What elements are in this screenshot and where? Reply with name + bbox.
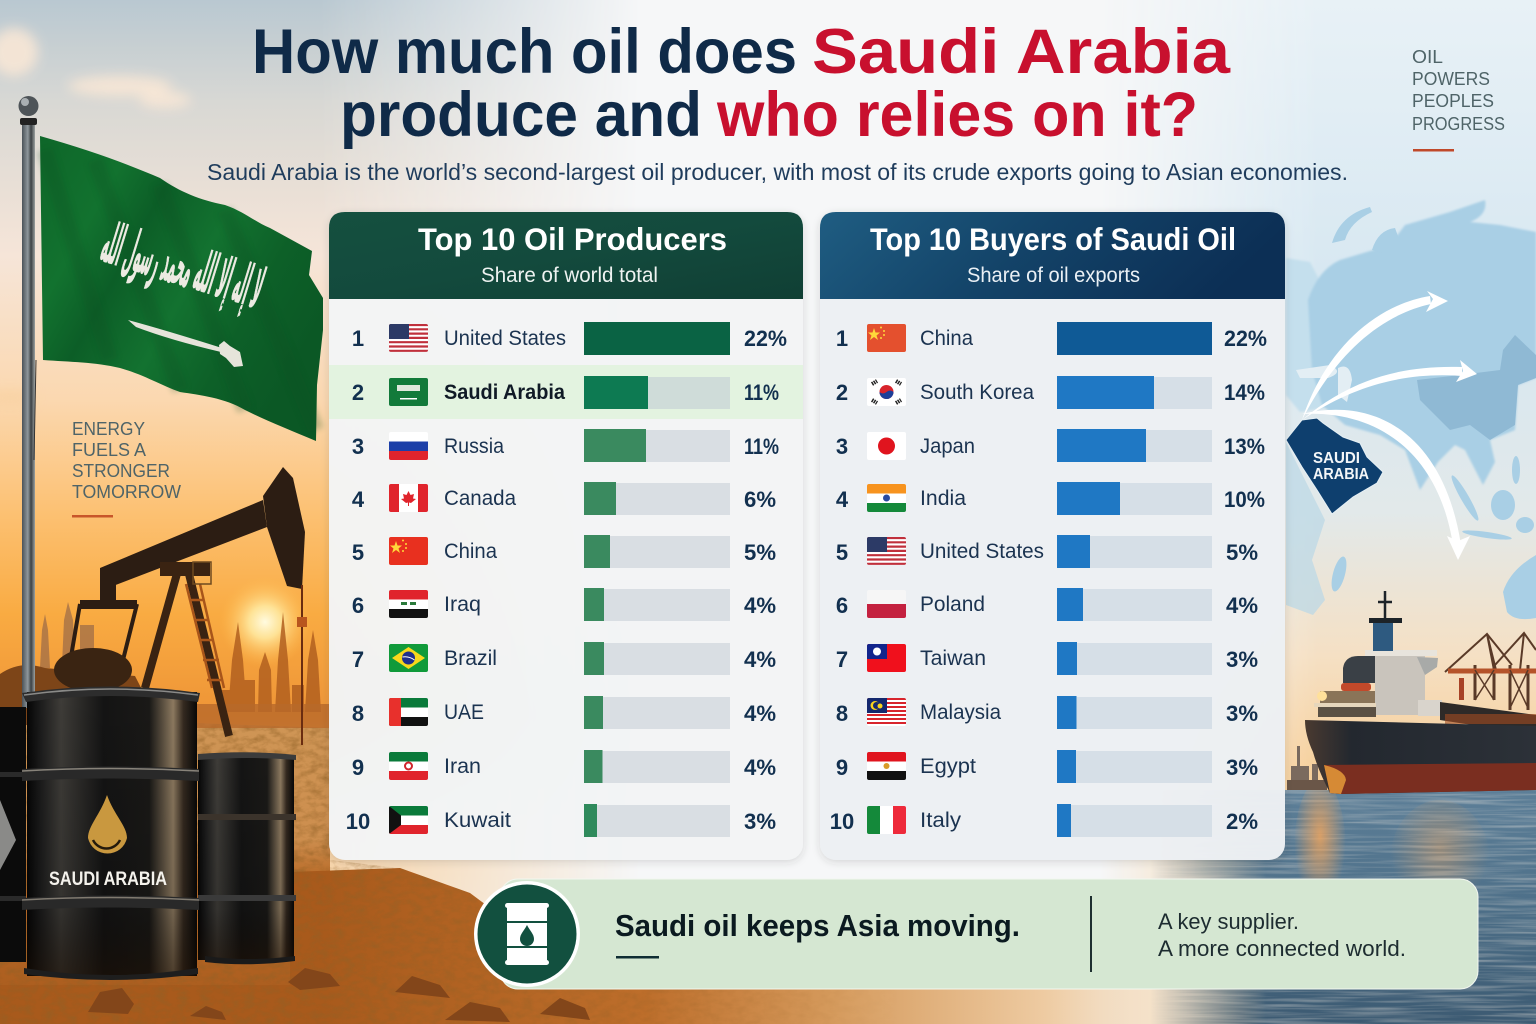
ship superstructure bbox=[1314, 591, 1442, 717]
row: Iraq: Iraq bbox=[444, 593, 481, 616]
row: Italy: Italy bbox=[920, 809, 962, 832]
row: China: 1 bbox=[836, 326, 848, 351]
row: Egypt: 3% bbox=[1226, 755, 1258, 780]
title: who relies on it? bbox=[716, 80, 1198, 150]
row: Poland: 6 bbox=[836, 593, 848, 618]
row: Japan: 13% bbox=[1224, 434, 1265, 459]
banner note: A key supplier. bbox=[1158, 909, 1299, 934]
map: China bbox=[1417, 335, 1536, 440]
text: لا إله إلا الله محمد رسول الله bbox=[94, 211, 271, 322]
row: Poland bbox=[836, 588, 1258, 621]
panel body bbox=[820, 212, 1285, 860]
panel: top 10 oil producers bbox=[329, 212, 803, 860]
row: Kuwait: Kuwait bbox=[444, 809, 511, 832]
row: South Korea: 2 bbox=[836, 380, 848, 405]
distant port bbox=[1287, 746, 1327, 790]
row: Saudi Arabia: Saudi Arabia bbox=[444, 381, 565, 404]
ship cranes bbox=[1445, 633, 1536, 710]
row: United States: 5 bbox=[836, 540, 848, 565]
row: Canada: Canada bbox=[444, 487, 516, 510]
highlight row bbox=[329, 365, 803, 419]
row: Iraq: 4% bbox=[744, 593, 776, 618]
panel header: Share of oil exports bbox=[967, 264, 1140, 287]
ship waterline bbox=[1324, 763, 1536, 794]
map: Saudi Arabia bbox=[1286, 418, 1383, 514]
row: Russia: 11% bbox=[744, 434, 779, 459]
ship hull bbox=[1305, 720, 1536, 794]
row: Italy: 2% bbox=[1226, 809, 1258, 834]
row: China: 5 bbox=[352, 540, 364, 565]
barrel: far left bbox=[0, 707, 26, 962]
row: Iran: 9 bbox=[352, 755, 364, 780]
barrel label: SAUDI ARABIA bbox=[49, 869, 167, 890]
row: China: 22% bbox=[1224, 326, 1267, 351]
row: Italy: 10 bbox=[830, 809, 854, 834]
row: Brazil: 7 bbox=[352, 647, 364, 672]
row: South Korea bbox=[836, 376, 1265, 409]
banner note bbox=[1158, 909, 1406, 961]
Saudi flag bbox=[40, 136, 323, 441]
row: Taiwan: 3% bbox=[1226, 647, 1258, 672]
row: Kuwait bbox=[346, 804, 776, 837]
tagline: energy: TOMORROW bbox=[72, 482, 181, 502]
row: UAE: 4% bbox=[744, 701, 776, 726]
pumpjack cable bbox=[297, 585, 307, 745]
title: produce and bbox=[340, 80, 702, 150]
panel header: Top 10 Oil Producers bbox=[418, 221, 727, 257]
pumpjack beam bbox=[100, 500, 267, 591]
row: Poland: Poland bbox=[920, 593, 985, 616]
row: China bbox=[352, 535, 776, 568]
row: Canada: 6% bbox=[744, 487, 776, 512]
barrel: right small bbox=[198, 752, 296, 964]
row: UAE bbox=[352, 696, 776, 729]
tagline: energy: FUELS A bbox=[72, 440, 146, 460]
row: China: 5% bbox=[744, 540, 776, 565]
row: Canada bbox=[352, 482, 776, 515]
row: India: India bbox=[920, 487, 966, 510]
row: Poland: 4% bbox=[1226, 593, 1258, 618]
panel header: Top 10 Buyers of Saudi Oil bbox=[870, 221, 1236, 257]
tagline: oil powers: PEOPLES bbox=[1412, 91, 1494, 111]
row: Brazil bbox=[352, 642, 776, 675]
row: Saudi Arabia: 2 bbox=[352, 380, 364, 405]
desert ground bbox=[0, 724, 1177, 1024]
row: Malaysia: 3% bbox=[1226, 701, 1258, 726]
panel header bbox=[820, 212, 1285, 299]
row: Canada: 4 bbox=[352, 487, 365, 512]
banner background bbox=[500, 879, 1478, 989]
row: Russia: Russia bbox=[444, 435, 504, 458]
row: Iraq bbox=[352, 588, 776, 621]
illustration: pumpjack bbox=[54, 467, 307, 745]
row: Brazil: Brazil bbox=[444, 647, 497, 670]
tagline: oil powers: OIL bbox=[1412, 47, 1443, 67]
row: China: China bbox=[920, 327, 973, 350]
row: China bbox=[836, 322, 1267, 355]
arrow: south bbox=[1302, 410, 1470, 560]
ship deck cargo bbox=[1440, 702, 1536, 735]
title: How much oil does bbox=[252, 17, 797, 87]
row: United States: 5% bbox=[1226, 540, 1258, 565]
world map bbox=[1286, 200, 1536, 619]
row: Kuwait: 3% bbox=[744, 809, 776, 834]
flagpole bbox=[18, 96, 38, 708]
barrel logo: oil drop bbox=[88, 795, 127, 854]
row: Iran: 4% bbox=[744, 755, 776, 780]
panel header: Share of world total bbox=[481, 264, 658, 287]
row: India: 10% bbox=[1224, 487, 1265, 512]
row: India bbox=[836, 482, 1265, 515]
banner note: A more connected world. bbox=[1158, 936, 1406, 961]
row: Malaysia bbox=[836, 696, 1258, 729]
row: Russia bbox=[352, 429, 779, 462]
row: South Korea: 14% bbox=[1224, 380, 1265, 405]
panel header bbox=[329, 212, 803, 299]
banner headline: Saudi oil keeps Asia moving. bbox=[615, 908, 1020, 943]
row: UAE: UAE bbox=[444, 701, 484, 724]
map: Scandinavia bbox=[1332, 207, 1405, 255]
row: China: China bbox=[444, 540, 497, 563]
tagline: energy bbox=[72, 419, 181, 518]
title: Saudi Arabia bbox=[812, 17, 1231, 87]
panel body bbox=[329, 212, 803, 860]
oil barrels bbox=[0, 686, 296, 980]
row: Iran: Iran bbox=[444, 755, 481, 778]
map: Eurasia bbox=[1308, 200, 1536, 490]
arrow: east bbox=[1302, 360, 1477, 420]
foreground rocks bbox=[88, 968, 590, 1022]
row: UAE: 8 bbox=[352, 701, 364, 726]
pumpjack counterweight bbox=[54, 582, 137, 692]
tagline: oil powers bbox=[1412, 47, 1505, 152]
row: United States bbox=[352, 322, 787, 355]
row: Japan bbox=[836, 429, 1265, 462]
arrow: north bbox=[1302, 291, 1448, 420]
pumpjack ladder bbox=[186, 584, 224, 688]
row: Malaysia: 8 bbox=[836, 701, 848, 726]
row: Russia: 3 bbox=[352, 434, 364, 459]
tagline: oil powers: PROGRESS bbox=[1412, 114, 1505, 134]
map: Africa and islands bbox=[1286, 442, 1325, 615]
row: Japan: 3 bbox=[836, 434, 848, 459]
map: Europe bbox=[1286, 258, 1340, 412]
icon: barrel badge bbox=[474, 881, 580, 987]
row: India: 4 bbox=[836, 487, 849, 512]
row: Egypt: 9 bbox=[836, 755, 848, 780]
barrel: main bbox=[22, 686, 200, 980]
banner bbox=[474, 879, 1478, 989]
row: Taiwan: Taiwan bbox=[920, 647, 986, 670]
row: United States: 22% bbox=[744, 326, 787, 351]
illustration: sunset skyline and sun bbox=[0, 576, 330, 728]
flag sword bbox=[128, 320, 243, 367]
row: Egypt: Egypt bbox=[920, 755, 976, 778]
row: Brazil: 4% bbox=[744, 647, 776, 672]
panel: top 10 buyers of Saudi oil bbox=[820, 212, 1285, 860]
cargo ship bbox=[1287, 591, 1536, 794]
map label: ARABIA bbox=[1313, 466, 1369, 483]
row: Italy bbox=[830, 804, 1258, 837]
pumpjack horse head bbox=[263, 467, 305, 589]
tagline: energy: ENERGY bbox=[72, 419, 145, 439]
harbour water bbox=[1150, 780, 1536, 1024]
row: South Korea: South Korea bbox=[920, 381, 1034, 404]
row: Saudi Arabia: 11% bbox=[744, 380, 779, 405]
tagline: energy: STRONGER bbox=[72, 461, 170, 481]
map label: SAUDI bbox=[1313, 450, 1360, 467]
row: Iraq: 6 bbox=[352, 593, 364, 618]
row: Iran bbox=[352, 750, 776, 783]
row: United States: United States bbox=[444, 327, 566, 350]
subtitle: Saudi Arabia is the world’s second-largest oil producer, with most of its crude exports going to Asian economies. bbox=[207, 159, 1348, 185]
row: Saudi Arabia bbox=[352, 376, 779, 409]
row: Taiwan: 7 bbox=[836, 647, 848, 672]
row: United States bbox=[836, 535, 1258, 568]
row: Taiwan bbox=[836, 642, 1258, 675]
row: Japan: Japan bbox=[920, 435, 975, 458]
tagline: oil powers: POWERS bbox=[1412, 69, 1490, 89]
row: Malaysia: Malaysia bbox=[920, 701, 1001, 724]
row: United States: 1 bbox=[352, 326, 364, 351]
row: Egypt bbox=[836, 750, 1258, 783]
title bbox=[252, 17, 1231, 150]
row: Kuwait: 10 bbox=[346, 809, 370, 834]
row: United States: United States bbox=[920, 540, 1044, 563]
pumpjack A-frame bbox=[145, 570, 229, 736]
